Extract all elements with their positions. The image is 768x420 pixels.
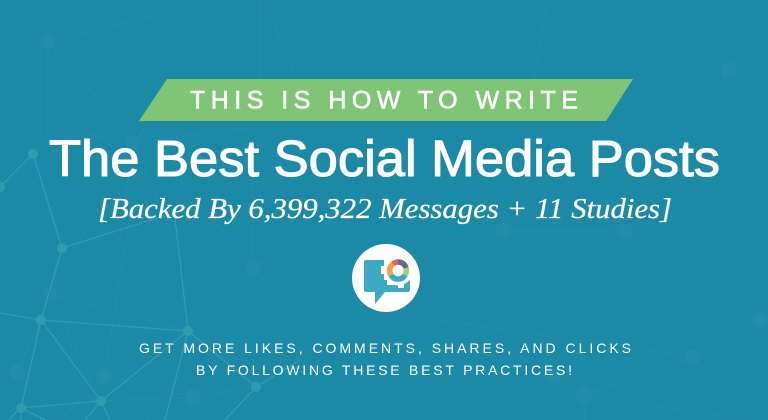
donut ring: [390, 262, 406, 279]
title: The Best Social Media Posts: [49, 130, 720, 187]
icon: speech bubble with gear and ring logo: [352, 244, 420, 312]
bright network background: [0, 149, 300, 420]
subtitle: [Backed By 6,399,322 Messages + 11 Studies]: [98, 194, 672, 225]
bottom text line two: BY FOLLOWING THESE BEST PRACTICES!: [196, 362, 572, 378]
ribbon text: THIS IS HOW TO WRITE: [190, 86, 578, 114]
bottom text line one: GET MORE LIKES, COMMENTS, SHARES, AND CLICKS: [139, 340, 631, 356]
green ribbon banner: [139, 79, 633, 121]
speech bubble: [364, 260, 410, 304]
gear: [381, 256, 412, 288]
